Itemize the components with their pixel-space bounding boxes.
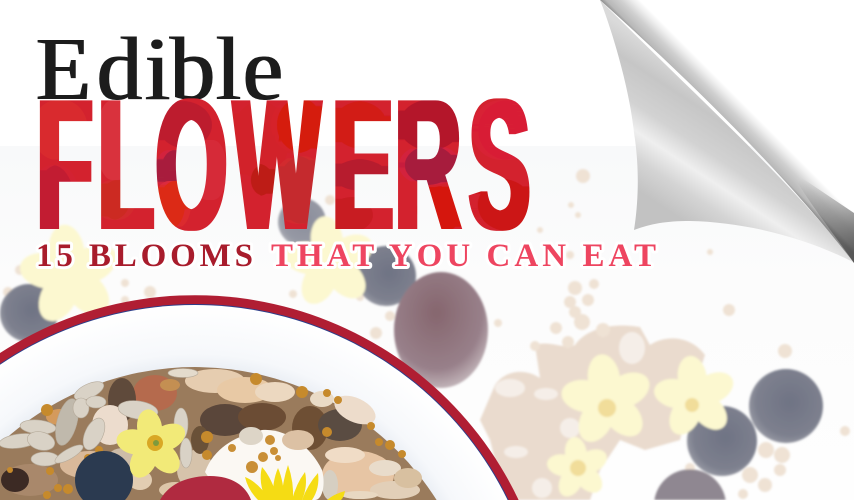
faded blueberries <box>0 198 823 500</box>
dark shading at fold tip <box>790 170 854 263</box>
walnut highlights <box>495 332 645 498</box>
blueberry <box>75 451 133 500</box>
pollen on yogurt <box>228 430 314 473</box>
table surface <box>0 146 854 500</box>
yogurt <box>205 430 324 500</box>
subtitle <box>36 238 656 274</box>
sunflower seeds <box>0 368 198 468</box>
grey seed on yogurt <box>239 427 263 445</box>
outer fold shading <box>600 0 854 263</box>
curled sheet <box>600 0 853 262</box>
subtitle dark part: 15 BLOOMS <box>36 238 253 274</box>
yellow primrose <box>114 408 190 483</box>
faded table decoration <box>0 169 850 500</box>
faded flower centres <box>570 398 699 476</box>
white underside corner <box>644 0 854 213</box>
faded walnuts <box>480 326 705 500</box>
faded plum <box>394 272 488 388</box>
bowl red rim <box>0 295 519 500</box>
bowl blue line <box>0 304 509 500</box>
title: Edible: Edible <box>36 20 283 119</box>
title: FLOWERS: FLOWERS <box>37 61 530 270</box>
cereal bowl <box>0 295 519 500</box>
faded crumbs <box>3 169 850 499</box>
granola clusters <box>1 369 422 500</box>
plum slice <box>160 476 251 500</box>
subtitle pink part: THAT YOU CAN EAT <box>271 238 656 274</box>
page curl <box>600 0 854 263</box>
bowl inner <box>0 305 508 500</box>
faded primrose flowers <box>17 214 739 500</box>
granola base <box>0 367 437 500</box>
bee pollen grains <box>7 373 406 499</box>
yellow daisy <box>245 465 345 500</box>
